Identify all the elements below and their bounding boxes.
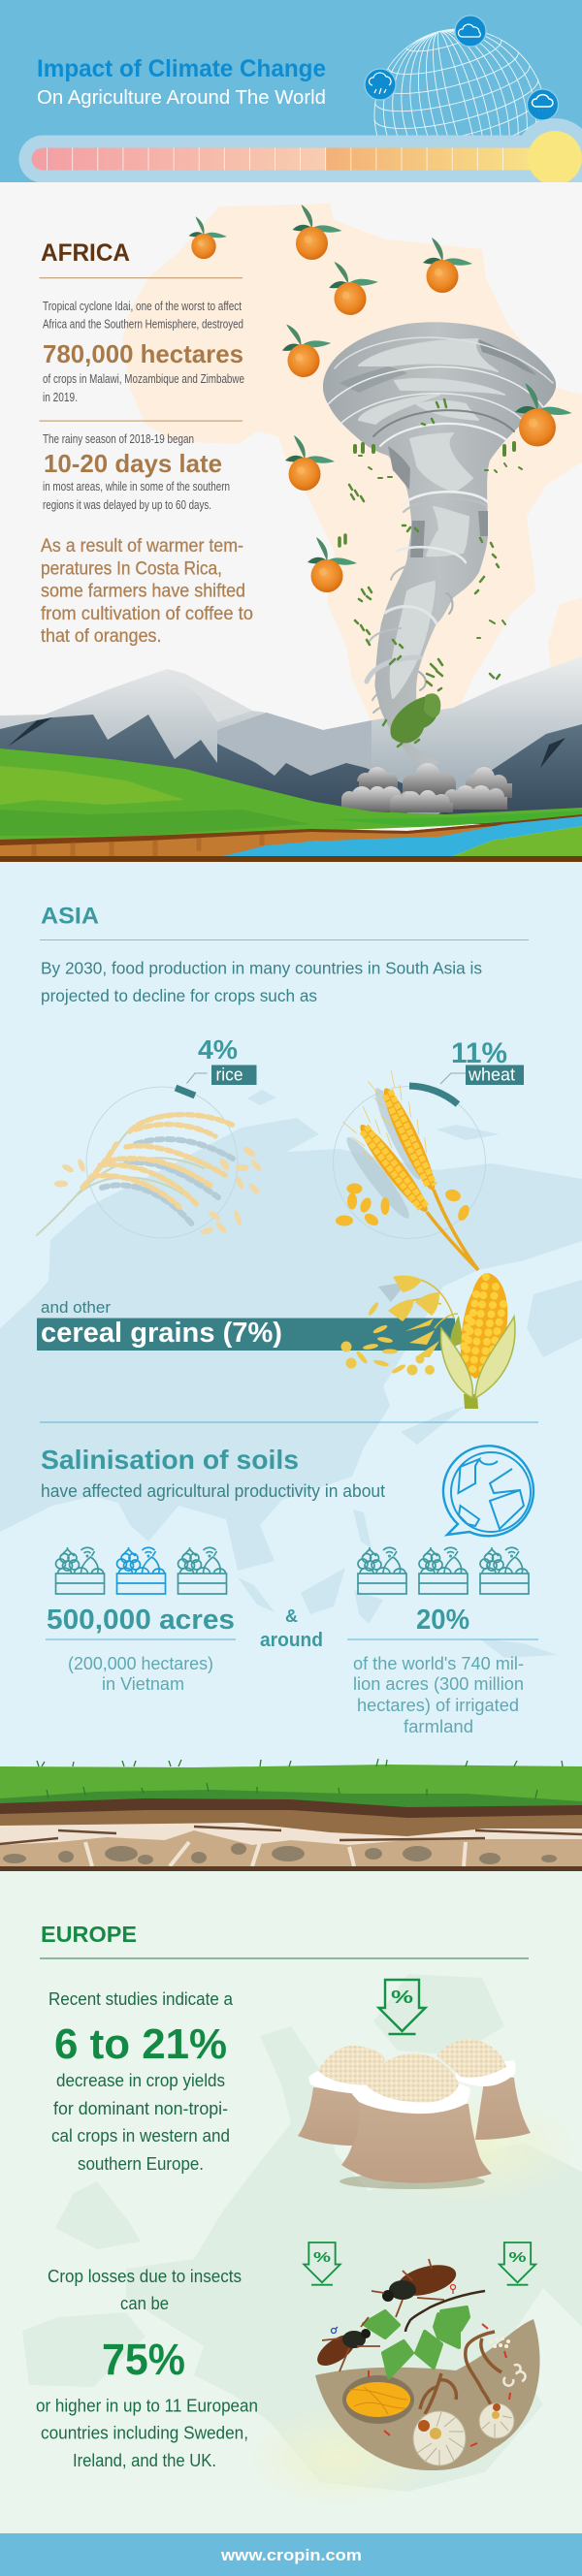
connector: and around: around xyxy=(260,1630,323,1651)
stat: 20%: of the world's 740 mil- xyxy=(353,1654,524,1673)
title: Impact of Climate Change xyxy=(37,55,326,82)
branch xyxy=(405,2291,485,2332)
loose rice grains xyxy=(54,1145,263,1235)
map of Asia xyxy=(0,1090,582,1658)
map of Africa xyxy=(122,204,582,722)
text block: rainy season xyxy=(43,432,230,512)
text block: Costa Rica xyxy=(41,536,253,647)
text block: Costa Rica: peratures In Costa Rica, xyxy=(41,558,222,580)
illustration: insect life cycle xyxy=(312,2259,540,2470)
map of Europe xyxy=(22,1974,582,2492)
stat: 20%: 20% xyxy=(416,1605,469,1636)
icon: percent down arrow left xyxy=(304,2242,340,2285)
chart: rice 4%: rice xyxy=(215,1065,242,1084)
illustration: grain sacks xyxy=(298,2039,531,2189)
icon: percent down arrow left: % xyxy=(313,2249,331,2266)
far river bank xyxy=(453,826,582,856)
panel: Asia xyxy=(0,862,582,1871)
text block: insect losses: countries including Sweden, xyxy=(41,2424,248,2443)
text block: crop yields: southern Europe. xyxy=(78,2154,204,2174)
header band xyxy=(0,0,582,218)
text block: cyclone Idai: Tropical cyclone Idai, one of the worst to affect xyxy=(43,300,242,313)
connector: and around: & xyxy=(285,1606,298,1626)
icon: percent down arrow xyxy=(378,1980,425,2034)
banner: cereal grains: cereal grains (7%) xyxy=(41,1318,282,1349)
chart: rice 4%: 4% xyxy=(198,1034,238,1065)
text block: South Asia projection xyxy=(41,958,482,1005)
stat: 20%: farmland xyxy=(404,1717,473,1736)
thermometer xyxy=(19,118,582,200)
stat: 500,000 acres: 500,000 acres xyxy=(47,1605,235,1636)
stat: 6 to 21%: 6 to 21% xyxy=(54,2020,227,2068)
stat: 75%: 75% xyxy=(102,2335,185,2384)
loose wheat kernels xyxy=(336,1183,471,1228)
tornado xyxy=(323,322,556,766)
weather icon: storm cloud xyxy=(365,69,396,100)
text block: crop yields: decrease in crop yields xyxy=(56,2071,225,2090)
text block: rainy season: in most areas, while in some of the southern xyxy=(43,480,230,493)
stat: 20%: lion acres (300 million xyxy=(353,1674,524,1694)
heading: Europe: EUROPE xyxy=(41,1922,137,1947)
text block: Costa Rica: that of oranges. xyxy=(41,626,161,647)
text block: crop yields: Recent studies indicate a xyxy=(48,1989,234,2009)
chart: wheat 11%: 11% xyxy=(451,1037,507,1069)
storm clouds xyxy=(341,763,512,812)
beetle: female xyxy=(372,2259,460,2317)
beetle: male xyxy=(312,2317,380,2371)
grubs xyxy=(413,2411,466,2465)
stat: 20%: hectares) of irrigated xyxy=(357,1696,519,1715)
panel: Africa xyxy=(0,182,582,862)
eggs and larvae xyxy=(491,2338,508,2346)
text block: crop yields xyxy=(48,1989,234,2174)
connector: and around xyxy=(260,1606,323,1651)
heading: Africa: AFRICA xyxy=(41,239,130,267)
text block: insect losses: can be xyxy=(120,2294,169,2313)
chart: wheat 11%: wheat xyxy=(468,1065,515,1084)
heading: salinisation of soils: Salinisation of soils xyxy=(41,1445,299,1475)
small life-cycle arrows xyxy=(369,2324,510,2446)
icon: percent down arrow: % xyxy=(391,1988,413,2007)
map of Madagascar xyxy=(548,598,582,669)
stat: 780,000 hectares: 780,000 hectares xyxy=(43,339,243,368)
stat: 20% xyxy=(347,1605,538,1736)
chart: rice 4% xyxy=(37,1034,263,1238)
green hills xyxy=(0,748,582,845)
text block: crop yields: for dominant non-tropi- xyxy=(53,2099,228,2118)
footer: www.cropin.com xyxy=(220,2546,362,2564)
oranges xyxy=(189,205,572,592)
stat: 500,000 acres: (200,000 hectares) xyxy=(68,1654,213,1673)
icon: percent down arrow right xyxy=(500,2242,535,2285)
text block: Costa Rica: from cultivation of coffee to xyxy=(41,604,253,624)
text block: rainy season: regions it was delayed by up to 60 days. xyxy=(43,498,211,512)
text block: cyclone Idai: of crops in Malawi, Mozambique and Zimbabwe xyxy=(43,372,244,386)
icons: three crates left xyxy=(56,1547,227,1594)
soil bank xyxy=(0,814,582,856)
icon: percent down arrow right: % xyxy=(508,2249,526,2266)
illustration: oats and corn xyxy=(341,1273,515,1409)
text block: South Asia projection: By 2030, food production in many countries in South Asia is xyxy=(41,958,482,977)
footer xyxy=(0,2533,582,2576)
roots xyxy=(420,2332,501,2414)
river xyxy=(223,816,582,856)
text block: South Asia projection: projected to decline for crops such as xyxy=(41,986,317,1005)
soil cross-section xyxy=(0,1759,582,1871)
subtitle: On Agriculture Around The World xyxy=(37,87,326,109)
heading: Asia: ASIA xyxy=(41,904,99,929)
stat: 500,000 acres xyxy=(46,1605,236,1694)
icon: globe speech bubble xyxy=(443,1446,534,1536)
text block: Costa Rica: some farmers have shifted xyxy=(41,582,245,601)
text block: insect losses: Ireland, and the UK. xyxy=(73,2451,216,2470)
text block: insect losses xyxy=(36,2267,258,2470)
text block: rainy season: The rainy season of 2018-19 began xyxy=(43,432,194,446)
text block: insect losses: Crop losses due to insects xyxy=(48,2267,242,2286)
leaves xyxy=(364,2307,469,2377)
panel: Europe xyxy=(0,1871,582,2533)
stat: 500,000 acres: in Vietnam xyxy=(102,1674,184,1694)
flying leaves xyxy=(340,399,522,747)
chart: wheat 11% xyxy=(334,1037,524,1270)
gender symbols xyxy=(332,2284,456,2333)
weather icon: snow cloud xyxy=(528,89,559,120)
stat: 10-20 days late: 10-20 days late xyxy=(44,449,222,478)
mountains xyxy=(0,656,582,824)
text block: cyclone Idai: Africa and the Southern Hemisphere, destroyed xyxy=(43,318,243,332)
weather icon: cloud and sun xyxy=(455,16,486,47)
illustration: wheat xyxy=(340,1069,478,1270)
banner: cereal grains xyxy=(37,1318,455,1351)
text block: crop yields: cal crops in western and xyxy=(51,2126,230,2146)
text block: cyclone Idai xyxy=(43,300,244,404)
text block: insect losses: or higher in up to 11 European xyxy=(36,2397,258,2416)
text block: cyclone Idai: in 2019. xyxy=(43,391,78,404)
text: agricultural productivity: have affected agricultural productivity in about xyxy=(41,1480,385,1501)
illustration: rice xyxy=(37,1114,236,1235)
text block: Costa Rica: As a result of warmer tem- xyxy=(41,536,243,557)
globe wireframe xyxy=(356,11,564,218)
text: and other: and other xyxy=(41,1298,111,1317)
pupa xyxy=(342,2375,414,2424)
icons: three crates right xyxy=(358,1547,529,1594)
